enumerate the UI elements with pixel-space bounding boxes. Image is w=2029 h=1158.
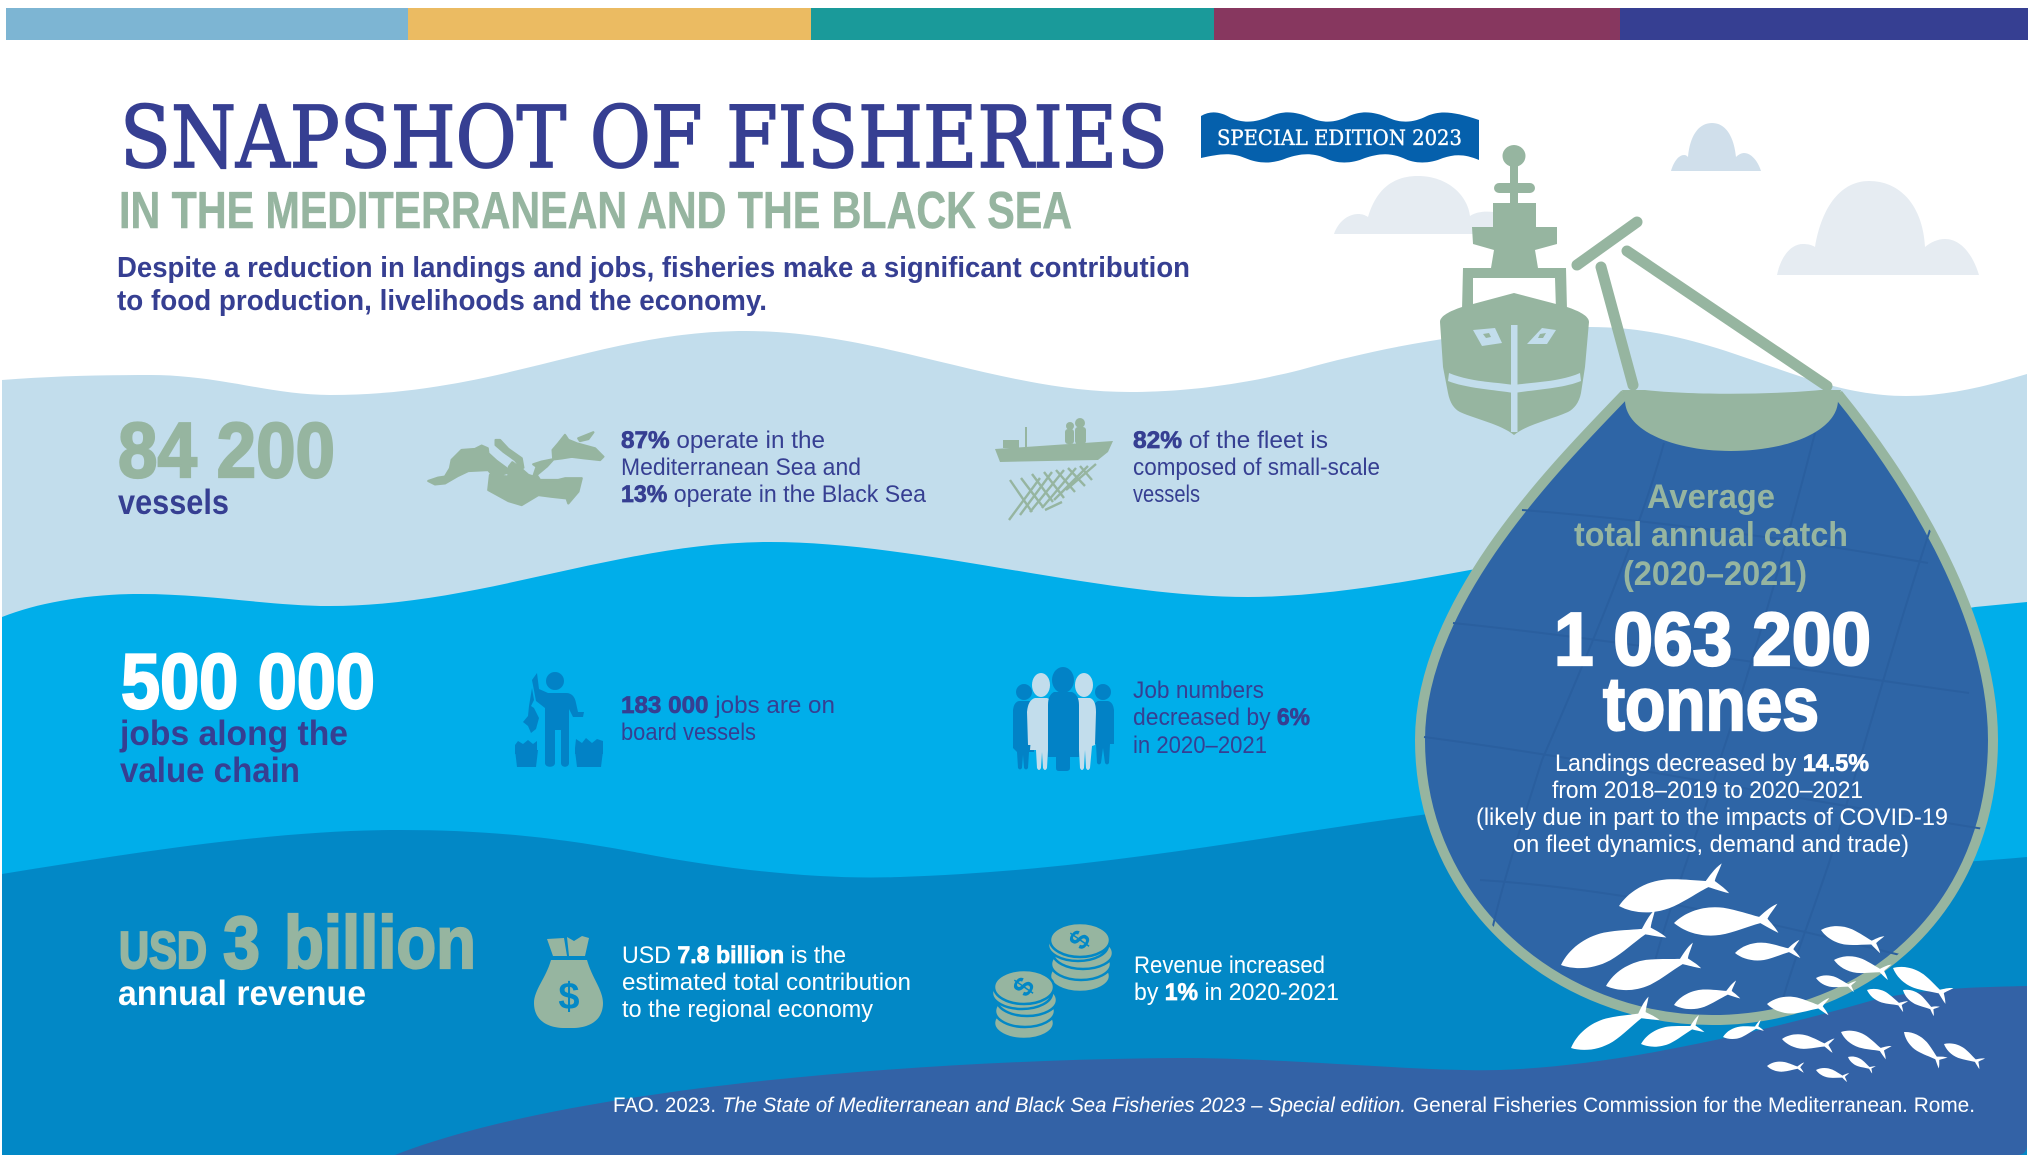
text: revenue increase — [1134, 952, 1339, 1006]
stat: jobs: value chain — [120, 751, 300, 790]
text: regional economy: USD 7.8 billion is the — [622, 942, 846, 969]
text: landings decrease: from 2018–2019 to 2020–2021 — [1552, 777, 1863, 804]
text: basin split — [621, 427, 927, 508]
intro text — [117, 252, 1190, 317]
icon: coin stacks: $ — [1062, 924, 1097, 955]
stat: jobs: jobs along the — [119, 714, 348, 753]
icon: trawl booms — [1577, 222, 1827, 386]
text: job decrease: decreased by 6% — [1133, 704, 1310, 731]
text: jobs on board: board vessels — [621, 719, 756, 746]
text: regional economy: to the regional economy — [622, 996, 873, 1023]
top colour band — [6, 8, 2028, 40]
text: small-scale fleet: vessels — [1133, 481, 1200, 508]
heading: average catch: (2020–2021) — [1623, 555, 1807, 593]
text: small-scale fleet: composed of small-scale — [1133, 454, 1380, 481]
text: basin split: 87% operate in the — [621, 427, 825, 454]
cloud: small top — [1671, 123, 1761, 171]
intro text: Despite a reduction in landings and jobs, fisheries make a significant contribution — [117, 252, 1190, 284]
text: landings decrease: Landings decreased by 14.5% — [1555, 750, 1869, 777]
icon: money bag — [534, 936, 603, 1028]
cloud: left of ship — [1334, 176, 1494, 234]
icon: coin stacks: $ — [1006, 971, 1041, 1002]
wave: footer band — [395, 986, 2027, 1155]
icon: fisher with fish and buckets — [515, 672, 603, 767]
icon: money bag: $ — [558, 976, 580, 1018]
text: job decrease — [1133, 677, 1310, 759]
icon: group of people — [1013, 667, 1114, 771]
stat: vessels: vessels — [118, 483, 229, 522]
stat: jobs — [119, 637, 375, 790]
cloud: right — [1777, 181, 1979, 275]
wave: deep blue revenue band — [2, 810, 2027, 1155]
intro text: to food production, livelihoods and the economy. — [117, 285, 767, 317]
badge: special edition: SPECIAL EDITION 2023 — [1217, 126, 1462, 150]
text: landings decrease — [1476, 750, 1948, 858]
heading: average catch: total annual catch — [1574, 516, 1848, 554]
badge: special edition — [1201, 112, 1479, 162]
wave: light blue vessels band — [2, 327, 2027, 1155]
text: basin split: 13% operate in the Black Sea — [621, 481, 927, 508]
footer citation: General Fisheries Commission for the Mediterranean. Rome. — [1413, 1093, 1975, 1117]
icon: school of fish — [1555, 863, 1985, 1082]
subtitle: IN THE MEDITERRANEAN AND THE BLACK SEA — [119, 182, 1072, 240]
panel: catch net drop — [1420, 390, 1993, 1020]
icon: coin stacks — [992, 923, 1113, 1039]
stat: vessels: 84 200 — [118, 406, 335, 494]
text: landings decrease: (likely due in part to the impacts of COVID-19 — [1476, 804, 1948, 831]
stat: tonnes: tonnes — [1603, 662, 1819, 746]
stat: tonnes: 1 063 200 — [1554, 597, 1871, 681]
wave: mid blue jobs band — [2, 542, 2027, 1155]
text: jobs on board — [621, 692, 835, 746]
stat: revenue — [118, 901, 476, 1013]
text: jobs on board: 183 000 jobs are on — [621, 692, 835, 719]
icon: small boat with net — [995, 418, 1113, 520]
text: revenue increase: Revenue increased — [1134, 952, 1325, 979]
footer citation: FAO. 2023. — [613, 1093, 716, 1117]
text: basin split: Mediterranean Sea and — [621, 454, 861, 481]
stat: tonnes — [1554, 597, 1871, 746]
text: small-scale fleet — [1133, 427, 1380, 508]
text: revenue increase: by 1% in 2020-2021 — [1134, 979, 1339, 1006]
title: SNAPSHOT OF FISHERIES — [120, 89, 1168, 188]
footer citation: The State of Mediterranean and Black Sea Fisheries 2023 – Special edition. — [722, 1093, 1406, 1117]
text: regional economy — [622, 942, 911, 1023]
text: regional economy: estimated total contribution — [622, 969, 911, 996]
text: job decrease: Job numbers — [1133, 677, 1264, 704]
stat: revenue: 3 — [223, 901, 260, 984]
stat: jobs: 500 000 — [121, 637, 375, 725]
text: landings decrease: on fleet dynamics, demand and trade) — [1513, 831, 1909, 858]
heading: average catch: Average — [1647, 478, 1775, 516]
footer citation — [613, 1093, 1975, 1117]
stat: revenue: billion — [284, 901, 476, 984]
stat: revenue: annual revenue — [118, 974, 366, 1013]
stat: revenue: USD — [119, 922, 207, 980]
text: job decrease: in 2020–2021 — [1133, 732, 1267, 759]
icon: fishing vessel — [1440, 145, 1589, 435]
text: small-scale fleet: 82% of the fleet is — [1133, 427, 1328, 454]
icon: Mediterranean map — [428, 432, 603, 505]
heading: average catch — [1574, 478, 1848, 593]
